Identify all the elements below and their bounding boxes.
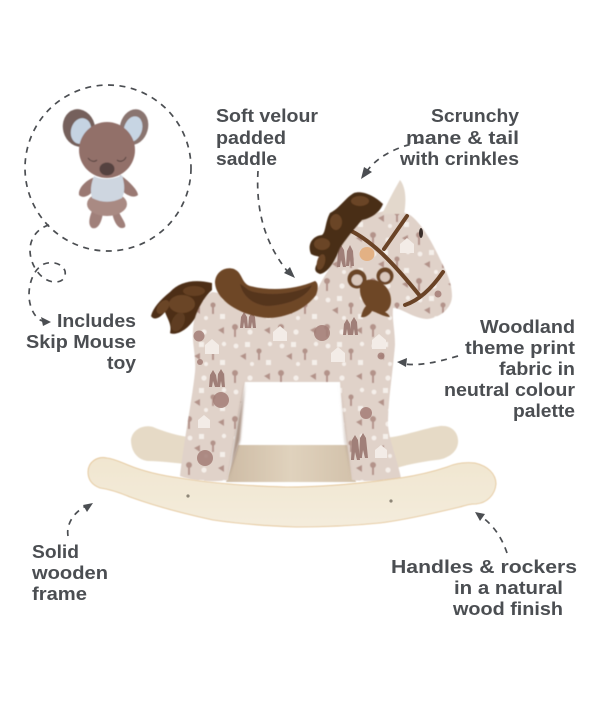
label: Soft velour padded saddle: [216, 105, 318, 169]
arrow: handles and rockers: [475, 512, 507, 553]
label: Solid wooden frame: [31, 541, 108, 604]
horse bridle: [347, 216, 443, 305]
label: Scrunchy mane and tail with crinkles: mane & tail: [406, 127, 519, 148]
label: Scrunchy mane and tail with crinkles: with crinkles: [399, 148, 519, 169]
arrow: mane: [361, 142, 421, 179]
horse body fabric: [180, 211, 452, 481]
mouse belly: [91, 175, 124, 202]
toy mouse callout circle: [25, 85, 191, 251]
mouse shorts: [87, 192, 127, 216]
white house motifs: [198, 238, 414, 458]
label: Solid wooden frame: Solid: [32, 541, 79, 562]
label: Woodland theme print fabric: [444, 316, 575, 421]
label: Woodland theme print fabric: theme print: [465, 337, 575, 358]
label: Includes Skip Mouse toy: Includes: [57, 310, 136, 331]
arrow: solid wooden frame: [68, 503, 93, 536]
mouse arms: [79, 175, 138, 197]
horse ear: [382, 180, 405, 214]
front rocker: [88, 458, 496, 527]
arrow: looping dashed line to Includes label: [29, 225, 65, 326]
label: Handles and rockers in a natural wood finish: [391, 556, 577, 619]
icon: Skip Mouse plush toy: [59, 106, 152, 228]
label: Scrunchy mane and tail with crinkles: [399, 105, 520, 169]
label: Handles and rockers in a natural wood finish: in a natural: [454, 577, 563, 598]
arrow: saddle: [258, 171, 295, 278]
brown silhouette figures: [209, 245, 368, 460]
label: Soft velour padded saddle: saddle: [216, 148, 277, 169]
mouse closed eyes: [88, 157, 126, 161]
wooden handle peg: [360, 247, 374, 261]
label: Includes Skip Mouse toy: [26, 310, 137, 373]
label: Includes Skip Mouse toy: toy: [107, 352, 137, 373]
label: Scrunchy mane and tail with crinkles: Scrunchy: [431, 105, 520, 126]
label: Woodland theme print fabric: fabric in: [499, 358, 575, 379]
horse eye: [419, 228, 423, 238]
label: Soft velour padded saddle: Soft velour: [216, 105, 318, 126]
mouse right ear: [116, 106, 152, 148]
mouse left ear: [59, 106, 99, 150]
fabric print motifs: [194, 238, 442, 466]
label: Soft velour padded saddle: padded: [216, 127, 286, 148]
label: Woodland theme print fabric: Woodland: [480, 316, 575, 337]
mouse head: [79, 122, 135, 178]
arrow: woodland fabric: [397, 356, 458, 367]
small mouse on horse: [348, 268, 394, 317]
label: Solid wooden frame: wooden: [31, 562, 108, 583]
pink round tree motifs: [194, 290, 442, 466]
label: Solid wooden frame: frame: [32, 583, 87, 604]
label: Includes Skip Mouse toy: Skip Mouse: [26, 331, 136, 352]
saddle: [215, 268, 318, 318]
rocking horse illustration: [88, 180, 496, 527]
label: Handles and rockers in a natural wood finish: wood finish: [452, 598, 563, 619]
rocker screws: [186, 494, 393, 503]
mouse nose: [100, 162, 114, 176]
label: Woodland theme print fabric: palette: [513, 400, 575, 421]
horse tail: [151, 281, 212, 334]
horse mane: [310, 192, 383, 274]
back rocker: [131, 426, 458, 470]
label: Woodland theme print fabric: neutral colour: [444, 379, 575, 400]
horse leg shading: [228, 382, 352, 480]
mouse legs: [89, 208, 125, 228]
label: Handles and rockers in a natural wood finish: Handles & rockers: [391, 556, 577, 577]
middle plank: [226, 445, 356, 482]
